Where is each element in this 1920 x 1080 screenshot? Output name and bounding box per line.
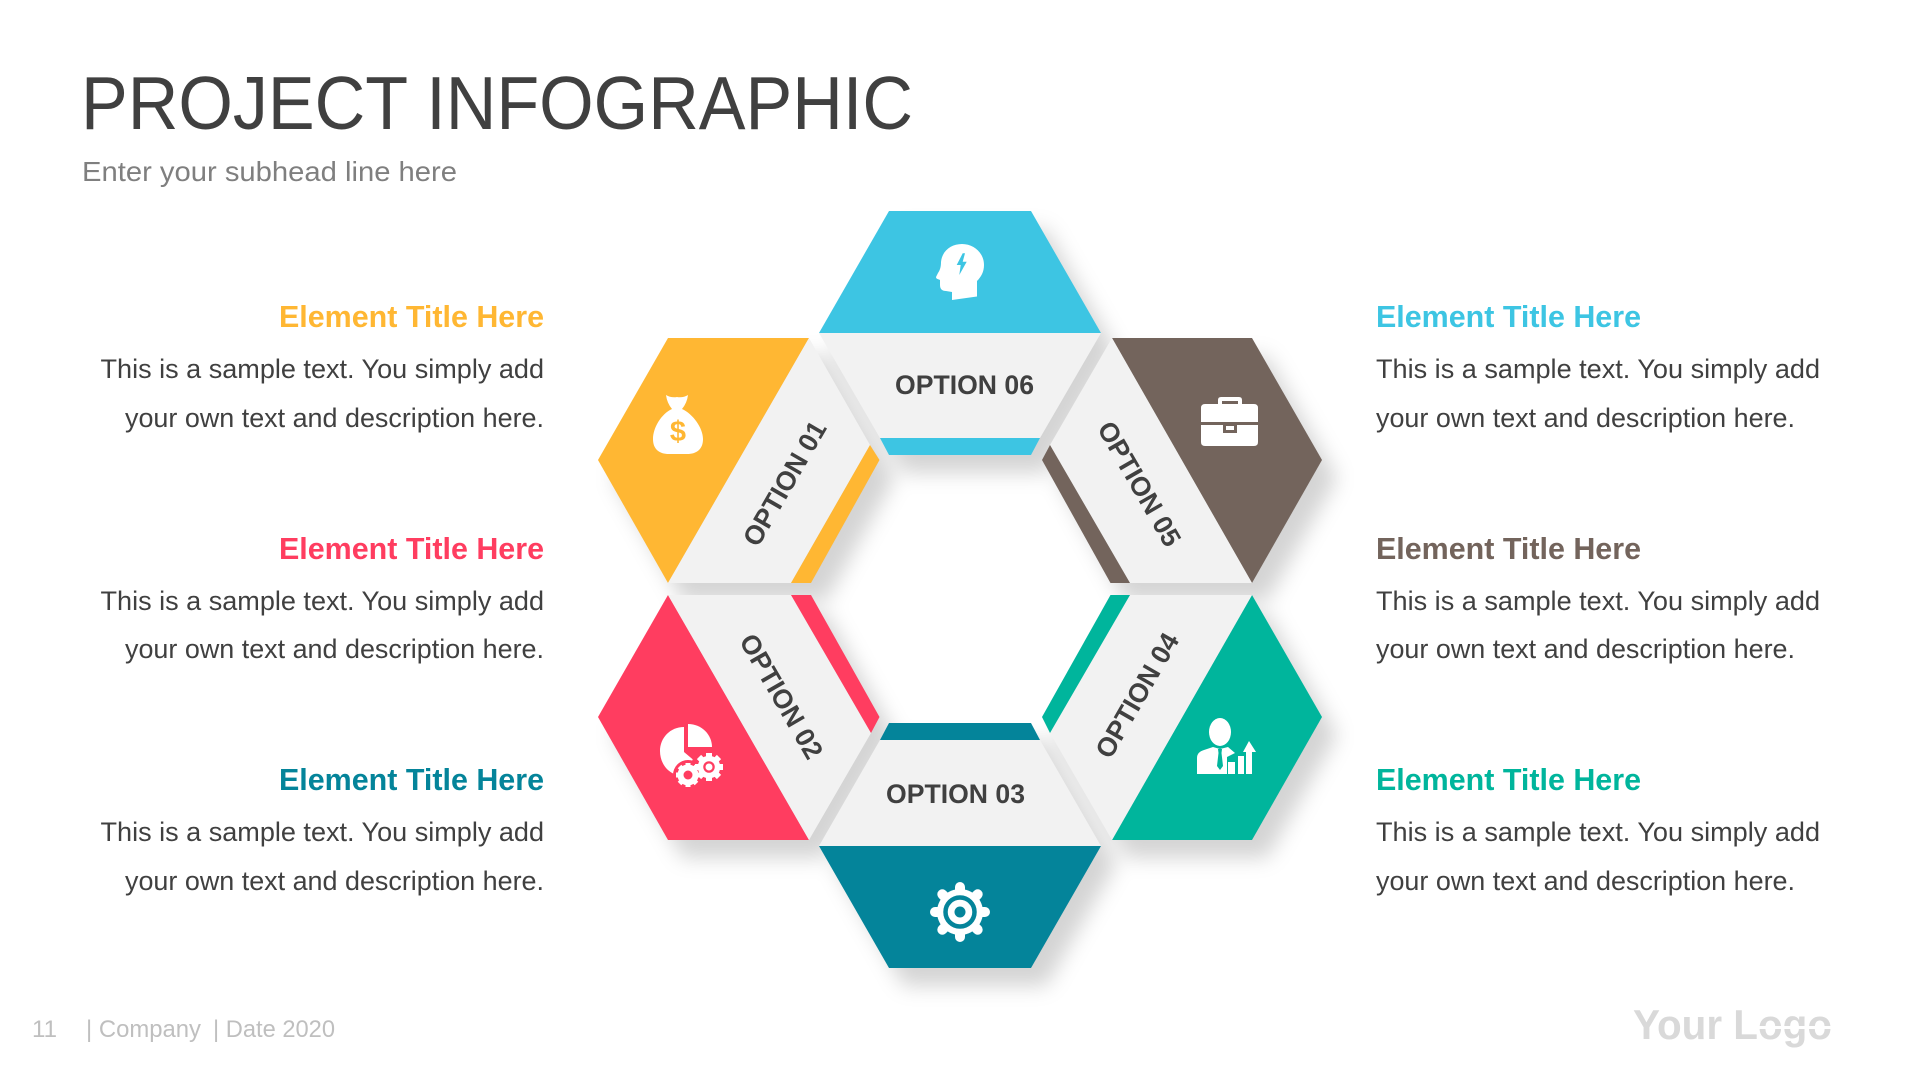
text block: right element 2: Element Title Here (1376, 531, 1641, 566)
logo: Your Logo (1633, 1001, 1832, 1048)
icon: head with lightning bolt (936, 244, 984, 300)
title: PROJECT INFOGRAPHIC (81, 61, 913, 145)
text block: left element 1 (100, 299, 544, 433)
text block: right element 2: your own text and description here. (1376, 634, 1795, 664)
text block: left element 2: your own text and description here. (125, 634, 544, 664)
panel: option 04 hexagon (1042, 595, 1322, 840)
text block: right element 2 (1376, 531, 1820, 664)
text block: right element 3 (1376, 762, 1820, 896)
text block: right element 1: This is a sample text. You simply add (1376, 354, 1820, 384)
text block: right element 3: Element Title Here (1376, 762, 1641, 797)
footer: page number: 11 (32, 1016, 57, 1043)
panel: option 05 hexagon (1042, 338, 1322, 583)
icon: briefcase (1201, 397, 1258, 446)
text block: left element 3: your own text and description here. (125, 866, 544, 896)
icon: money bag: $ (670, 416, 686, 448)
text block: right element 1: Element Title Here (1376, 299, 1641, 334)
panel: option 06 hexagon (819, 211, 1101, 455)
text block: left element 2 (100, 531, 544, 664)
text block: left element 1: Element Title Here (279, 299, 544, 334)
label: option 06: OPTION 06 (895, 370, 1034, 400)
label: option 03: OPTION 03 (886, 779, 1025, 809)
text block: left element 2: Element Title Here (279, 531, 544, 566)
panel: option 01 hexagon (598, 338, 880, 583)
icon: money bag (653, 395, 703, 454)
text block: left element 2: This is a sample text. You simply add (100, 586, 544, 616)
text block: right element 2: This is a sample text. You simply add (1376, 586, 1820, 616)
label: option 01: OPTION 01 (737, 416, 833, 551)
panel: option 03 hexagon (819, 723, 1101, 968)
subtitle: Enter your subhead line here (82, 156, 457, 187)
icon: businessman with growth chart (1197, 718, 1256, 774)
panel: option 02 hexagon (598, 595, 880, 840)
text block: right element 1: your own text and description here. (1376, 403, 1795, 433)
text block: left element 3: Element Title Here (279, 762, 544, 797)
text block: left element 1: your own text and description here. (125, 403, 544, 433)
text block: left element 3 (100, 762, 544, 896)
text block: left element 1: This is a sample text. You simply add (100, 354, 544, 384)
footer: company: | Company (86, 1016, 201, 1043)
label: option 05: OPTION 05 (1091, 416, 1187, 552)
footer: date: | Date 2020 (213, 1016, 335, 1043)
label: option 04: OPTION 04 (1090, 628, 1185, 763)
icon: pie chart with gears (660, 724, 727, 790)
icon: gear (935, 887, 985, 937)
text block: right element 1 (1376, 299, 1820, 433)
text block: right element 3: This is a sample text. You simply add (1376, 817, 1820, 847)
text block: right element 3: your own text and description here. (1376, 866, 1795, 896)
text block: left element 3: This is a sample text. You simply add (100, 817, 544, 847)
label: option 02: OPTION 02 (733, 629, 829, 764)
